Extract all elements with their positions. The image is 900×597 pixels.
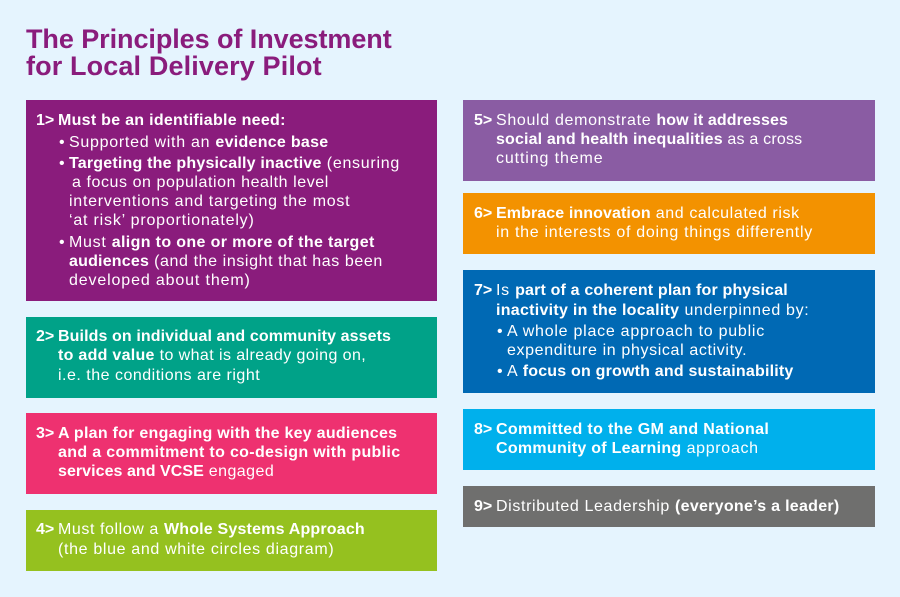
panel: principle 1: • — [59, 154, 65, 172]
panel: principle 2: 2> — [36, 328, 54, 344]
panel: principle 6: in the interests of doing things differently — [496, 224, 813, 240]
panel: principle 8: 8> — [474, 420, 492, 438]
panel: principle 1: Supported with an evidence base — [69, 134, 328, 150]
panel: principle 5: cutting theme — [496, 150, 604, 166]
panel: principle 1: • — [59, 134, 65, 150]
title — [26, 24, 392, 81]
panel: principle 7: • — [497, 322, 503, 340]
panel: principle 7: • — [497, 362, 503, 380]
panel: principle 1: interventions and targeting the most — [69, 192, 350, 210]
panel: principle 9: Distributed Leadership (everyone’s a leader) — [496, 498, 840, 514]
panel: principle 4: 4> — [36, 520, 54, 538]
panel: principle 7 — [463, 270, 875, 393]
panel: principle 3: and a commitment to co-design with public — [58, 444, 400, 460]
panel: principle 3: 3> — [36, 424, 54, 442]
panel: principle 5 — [463, 100, 875, 181]
panel: principle 1: Must align to one or more of the target — [69, 234, 375, 250]
panel: principle 6: 6> — [474, 204, 492, 222]
panel: principle 1: a focus on population health level — [72, 174, 329, 190]
panel: principle 3: A plan for engaging with the key audiences — [58, 424, 397, 442]
panel: principle 7: A whole place approach to public — [507, 322, 765, 340]
panel: principle 3 — [26, 413, 437, 494]
panel: principle 7: 7> — [474, 282, 492, 298]
panel: principle 7: inactivity in the locality underpinned by: — [496, 302, 809, 318]
panel: principle 1: Targeting the physically inactive (ensuring — [69, 154, 400, 172]
panel: principle 4: (the blue and white circles diagram) — [58, 540, 334, 558]
panel: principle 7: A focus on growth and sustainability — [507, 362, 794, 380]
panel: principle 2: Builds on individual and community assets — [58, 328, 391, 344]
panel: principle 2: i.e. the conditions are right — [58, 366, 260, 384]
panel: principle 1: developed about them) — [69, 272, 251, 288]
panel: principle 9 — [463, 486, 875, 527]
panel: principle 4: Must follow a Whole Systems Approach — [58, 520, 365, 538]
panel: principle 5: 5> — [474, 112, 492, 128]
panel: principle 8: Community of Learning approach — [496, 440, 759, 456]
panel: principle 8: Committed to the GM and National — [496, 420, 769, 438]
panel: principle 1: ‘at risk’ proportionately) — [69, 212, 255, 228]
panel: principle 7: expenditure in physical activity. — [507, 342, 747, 358]
panel: principle 3: services and VCSE engaged — [58, 462, 274, 480]
panel: principle 1: 1> — [36, 112, 54, 128]
panel: principle 1: Must be an identifiable need: — [58, 112, 286, 128]
panel: principle 5: social and health inequalities as a cross — [496, 130, 802, 148]
panel: principle 8 — [463, 409, 875, 470]
panel: principle 6: Embrace innovation and calculated risk — [496, 204, 800, 222]
panel: principle 1: audiences (and the insight that has been — [69, 252, 383, 270]
panel: principle 7: Is part of a coherent plan for physical — [496, 282, 788, 298]
panel: principle 4 — [26, 510, 437, 571]
title: for Local Delivery Pilot — [26, 51, 322, 81]
panel: principle 1 — [26, 100, 437, 301]
panel: principle 9: 9> — [474, 498, 492, 514]
panel: principle 2: to add value to what is already going on, — [58, 346, 366, 364]
panel: principle 2 — [26, 317, 437, 398]
panel: principle 6 — [463, 193, 875, 254]
panel: principle 1: • — [59, 234, 65, 250]
panel: principle 5: Should demonstrate how it addresses — [496, 112, 788, 128]
title: The Principles of Investment — [26, 24, 392, 54]
